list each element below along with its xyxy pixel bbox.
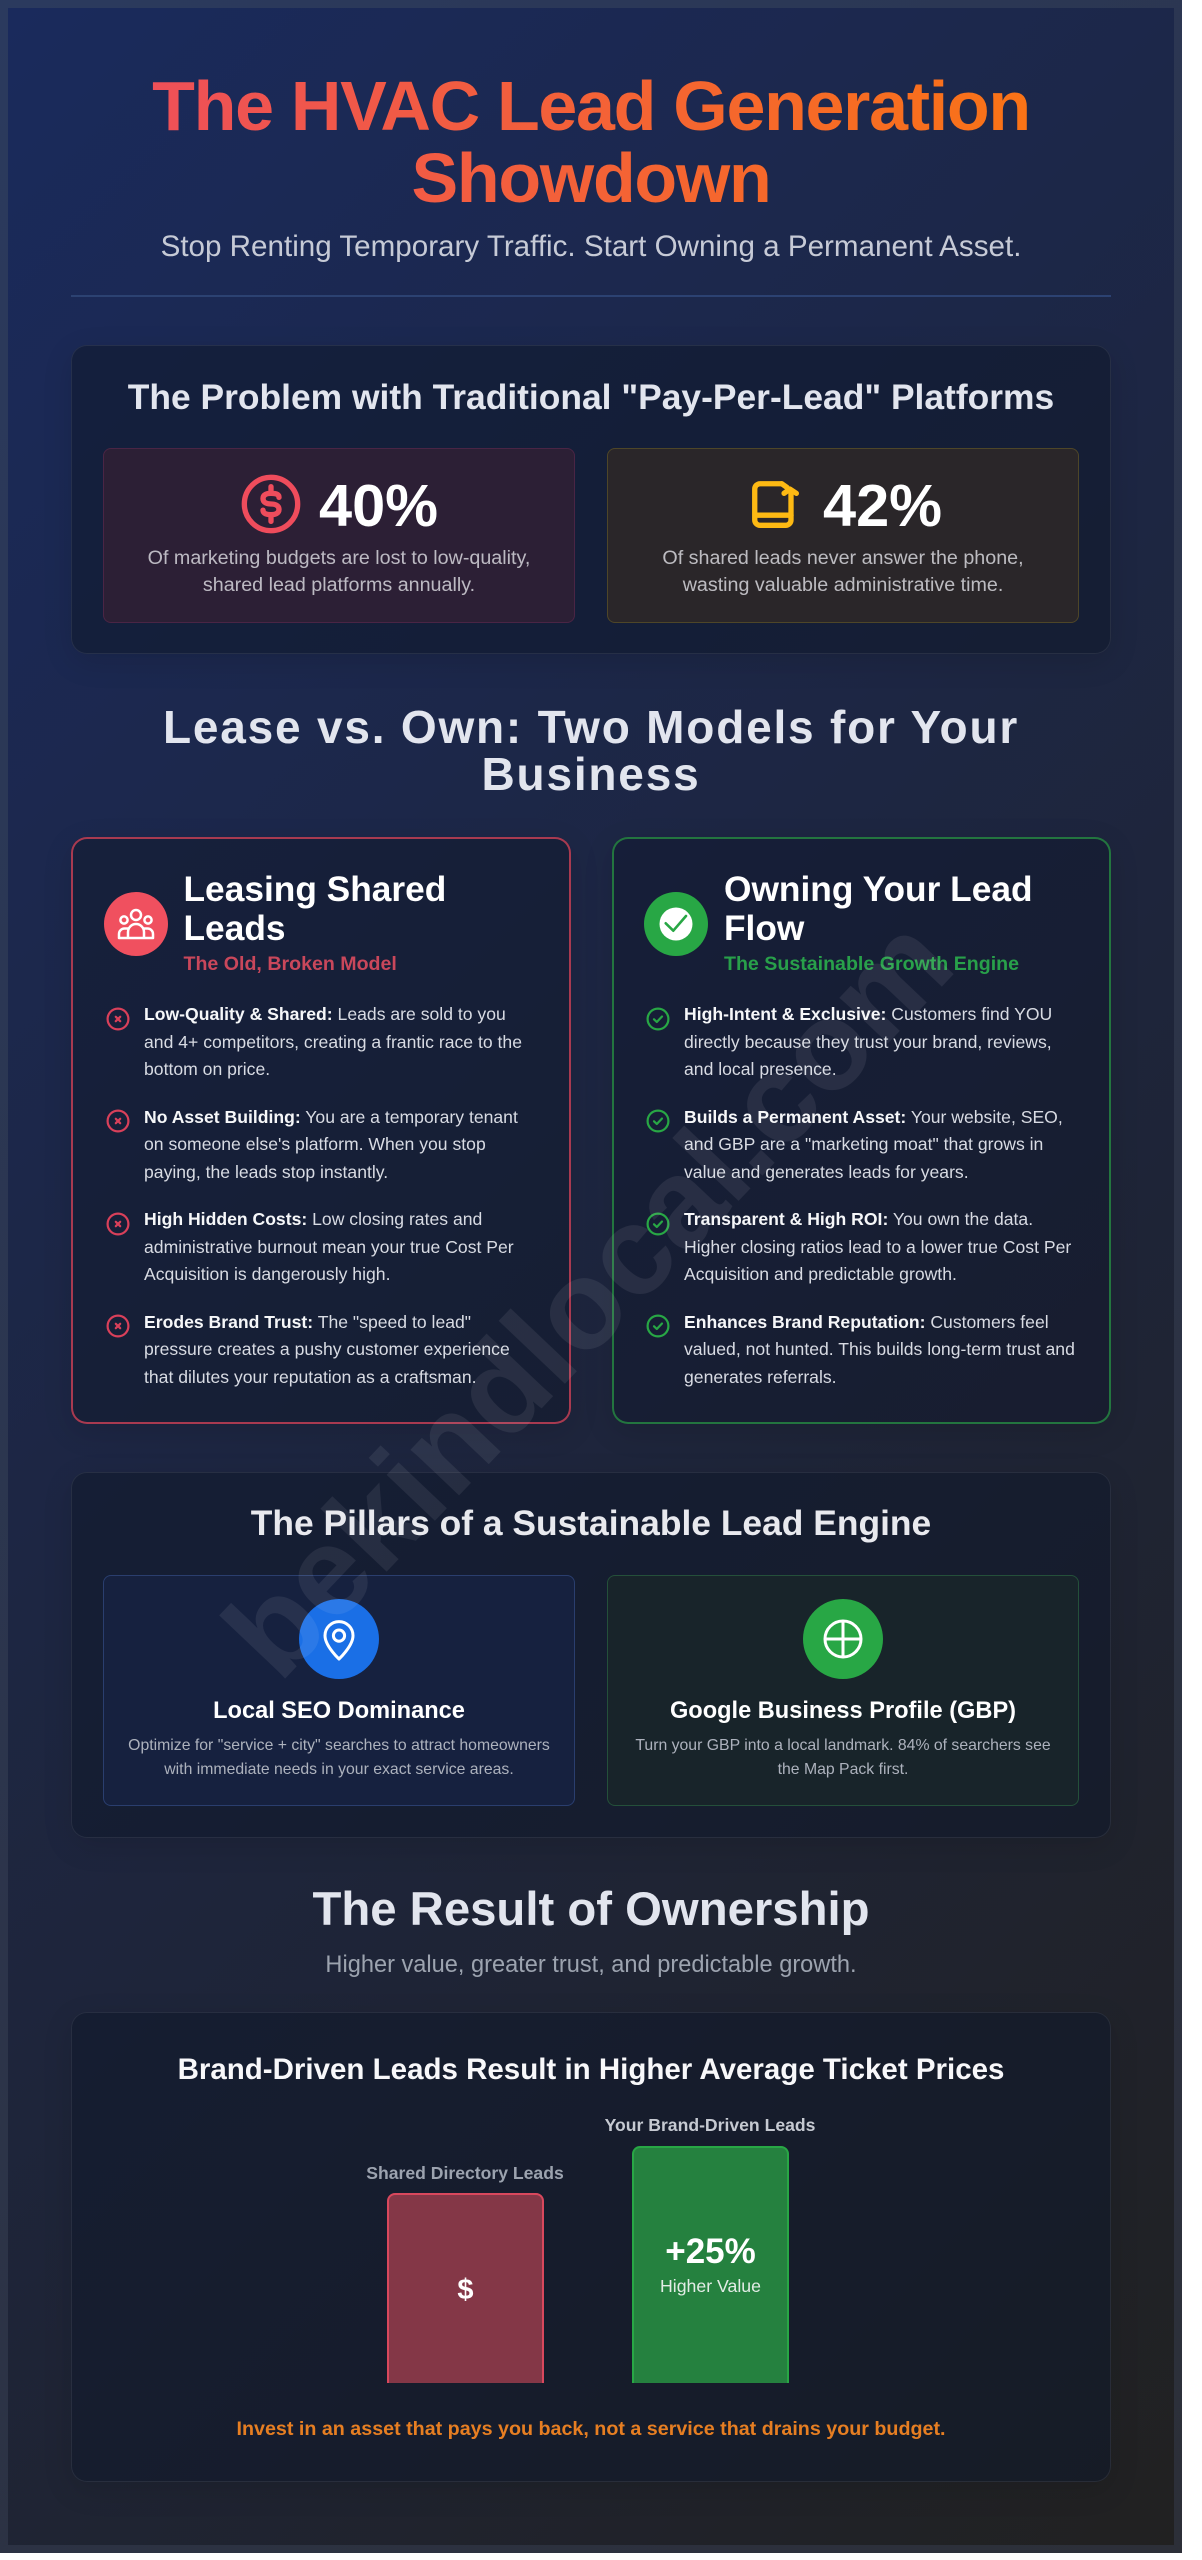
card title: Leads bbox=[184, 908, 286, 948]
bullet: permanent asset: value and generates leads for years. bbox=[684, 1162, 969, 1182]
section heading: lease vs own: Business bbox=[482, 748, 700, 800]
bullet: high intent bbox=[646, 1004, 1052, 1079]
bullet: brand reputation: Enhances Brand Reputation: Customers feel bbox=[684, 1312, 1049, 1332]
title: The HVAC Lead Generation bbox=[152, 66, 1030, 144]
card title bbox=[184, 870, 446, 948]
card title: Owning Your Lead bbox=[724, 870, 1033, 909]
bullet: low quality: bottom on price. bbox=[144, 1059, 270, 1079]
bar: Higher Value bbox=[660, 2276, 761, 2296]
bar group: brand-driven leads bbox=[605, 2115, 815, 2383]
bullet: brand reputation: generates referrals. bbox=[684, 1366, 837, 1386]
section heading: lease vs own: Lease vs. Own: Two Models for Your bbox=[163, 701, 1019, 753]
bar bbox=[632, 2146, 789, 2383]
bullet: hidden costs: administrative burnout mean your true Cost Per bbox=[144, 1236, 514, 1256]
stat number: 42% bbox=[823, 472, 942, 539]
bullet: hidden costs bbox=[106, 1209, 514, 1284]
problem heading: The Problem with Traditional "Pay-Per-Lead" Platforms bbox=[128, 377, 1054, 417]
bullet: transparent roi: Higher closing ratios lead to a lower true Cost Per bbox=[684, 1236, 1071, 1256]
bar: $ bbox=[457, 2274, 474, 2306]
bullet: no asset bbox=[106, 1106, 518, 1182]
stat card: 42 percent bbox=[607, 448, 1079, 623]
takeaway: Invest in an asset that pays you back, not a service that drains your budget. bbox=[237, 2418, 945, 2440]
pillar description bbox=[635, 1737, 1051, 1778]
bullet: transparent roi bbox=[646, 1209, 1071, 1284]
stat description bbox=[662, 546, 1024, 596]
bullet: low quality bbox=[106, 1004, 522, 1079]
panel: leasing shared leads bbox=[71, 837, 571, 1424]
bullet: no asset: No Asset Building: You are a temporary tenant bbox=[144, 1106, 518, 1126]
section heading: lease vs own bbox=[163, 701, 1019, 800]
bullet: low quality: Low-Quality & Shared: Leads are sold to you bbox=[144, 1004, 506, 1024]
stat description: Of marketing budgets are lost to low-quality, bbox=[148, 546, 530, 568]
stat description: Of shared leads never answer the phone, bbox=[662, 546, 1024, 568]
bullet: permanent asset: and GBP are a "marketing moat" that grows in bbox=[684, 1134, 1043, 1154]
card title: Leasing Shared bbox=[184, 870, 446, 909]
pillar description: the Map Pack first. bbox=[778, 1761, 908, 1778]
bullet: brand reputation: valued, not hunted. This builds long-term trust and bbox=[684, 1339, 1075, 1359]
bullet: brand trust: that dilutes your reputation as a craftsman. bbox=[144, 1366, 477, 1386]
bullet: high intent: directly because they trust your brand, reviews, bbox=[684, 1032, 1052, 1052]
bar bbox=[387, 2193, 544, 2383]
section heading: result: The Result of Ownership bbox=[312, 1882, 870, 1936]
icon: dollar circle bbox=[242, 474, 300, 534]
card title: Flow bbox=[724, 908, 804, 948]
icon: people group bbox=[104, 892, 168, 956]
bullet: brand trust: Erodes Brand Trust: The "speed to lead" bbox=[144, 1312, 471, 1332]
panel: owning your lead flow bbox=[612, 837, 1111, 1424]
panel: problem bbox=[71, 345, 1111, 654]
bullet: low quality: and 4+ competitors, creating a frantic race to the bbox=[144, 1032, 522, 1052]
bullet: permanent asset bbox=[646, 1106, 1063, 1182]
subtitle: Stop Renting Temporary Traffic. Start Owning a Permanent Asset. bbox=[161, 230, 1021, 263]
pillar card: gbp bbox=[607, 1575, 1079, 1806]
pillars heading: The Pillars of a Sustainable Lead Engine bbox=[251, 1503, 931, 1543]
panel: result chart bbox=[71, 2012, 1111, 2482]
stat description bbox=[148, 546, 530, 596]
bullet: hidden costs: Acquisition is dangerously high. bbox=[144, 1264, 390, 1284]
bar: +25% bbox=[665, 2232, 756, 2271]
icon: map pin bbox=[299, 1599, 379, 1679]
pillar description: Optimize for "service + city" searches to attract homeowners bbox=[128, 1737, 550, 1754]
bar label: Your Brand-Driven Leads bbox=[605, 2115, 815, 2135]
bullet: transparent roi: Transparent & High ROI: You own the data. bbox=[684, 1209, 1033, 1229]
stat card: 40 percent bbox=[103, 448, 575, 623]
stat description: shared lead platforms annually. bbox=[203, 574, 475, 596]
stat number: 40% bbox=[319, 472, 438, 539]
watermark: bekindlocal.com bbox=[197, 890, 979, 1703]
bullet: hidden costs: High Hidden Costs: Low closing rates and bbox=[144, 1209, 482, 1229]
chart title: Brand-Driven Leads Result in Higher Average Ticket Prices bbox=[178, 2053, 1004, 2086]
icon: check badge bbox=[644, 892, 708, 956]
bar label: Shared Directory Leads bbox=[366, 2163, 564, 2183]
bullet: high intent: High-Intent & Exclusive: Customers find YOU bbox=[684, 1004, 1052, 1024]
pillar description: with immediate needs in your exact service areas. bbox=[164, 1761, 514, 1778]
card title bbox=[724, 870, 1033, 948]
pillar title: Local SEO Dominance bbox=[213, 1698, 465, 1724]
bullet: brand trust: pressure creates a pushy customer experience bbox=[144, 1339, 510, 1359]
section subtitle: result: Higher value, greater trust, and predictable growth. bbox=[325, 1952, 857, 1978]
bullet: permanent asset: Builds a Permanent Asset: Your website, SEO, bbox=[684, 1106, 1063, 1126]
pillar card: local seo bbox=[103, 1575, 575, 1806]
bullet: no asset: on someone else's platform. When you stop bbox=[144, 1134, 486, 1154]
bullet: no asset: paying, the leads stop instantly. bbox=[144, 1162, 388, 1182]
pillar title: Google Business Profile (GBP) bbox=[670, 1698, 1016, 1724]
bar group: shared leads bbox=[366, 2163, 564, 2383]
title: Showdown bbox=[412, 138, 770, 216]
icon: globe bbox=[803, 1599, 883, 1679]
bullet: brand trust bbox=[106, 1312, 510, 1386]
pillar description: Turn your GBP into a local landmark. 84% of searchers see bbox=[635, 1737, 1051, 1754]
pillar description bbox=[128, 1737, 550, 1778]
stat description: wasting valuable administrative time. bbox=[683, 574, 1003, 596]
panel: pillars bbox=[71, 1472, 1111, 1838]
icon: document bbox=[752, 481, 799, 528]
card subtitle: The Old, Broken Model bbox=[184, 952, 397, 974]
bullet: brand reputation bbox=[646, 1312, 1075, 1386]
bullet: high intent: and local presence. bbox=[684, 1059, 837, 1079]
bullet: transparent roi: Acquisition and predictable growth. bbox=[684, 1264, 957, 1284]
card subtitle: The Sustainable Growth Engine bbox=[724, 952, 1019, 974]
title bbox=[152, 70, 1030, 214]
